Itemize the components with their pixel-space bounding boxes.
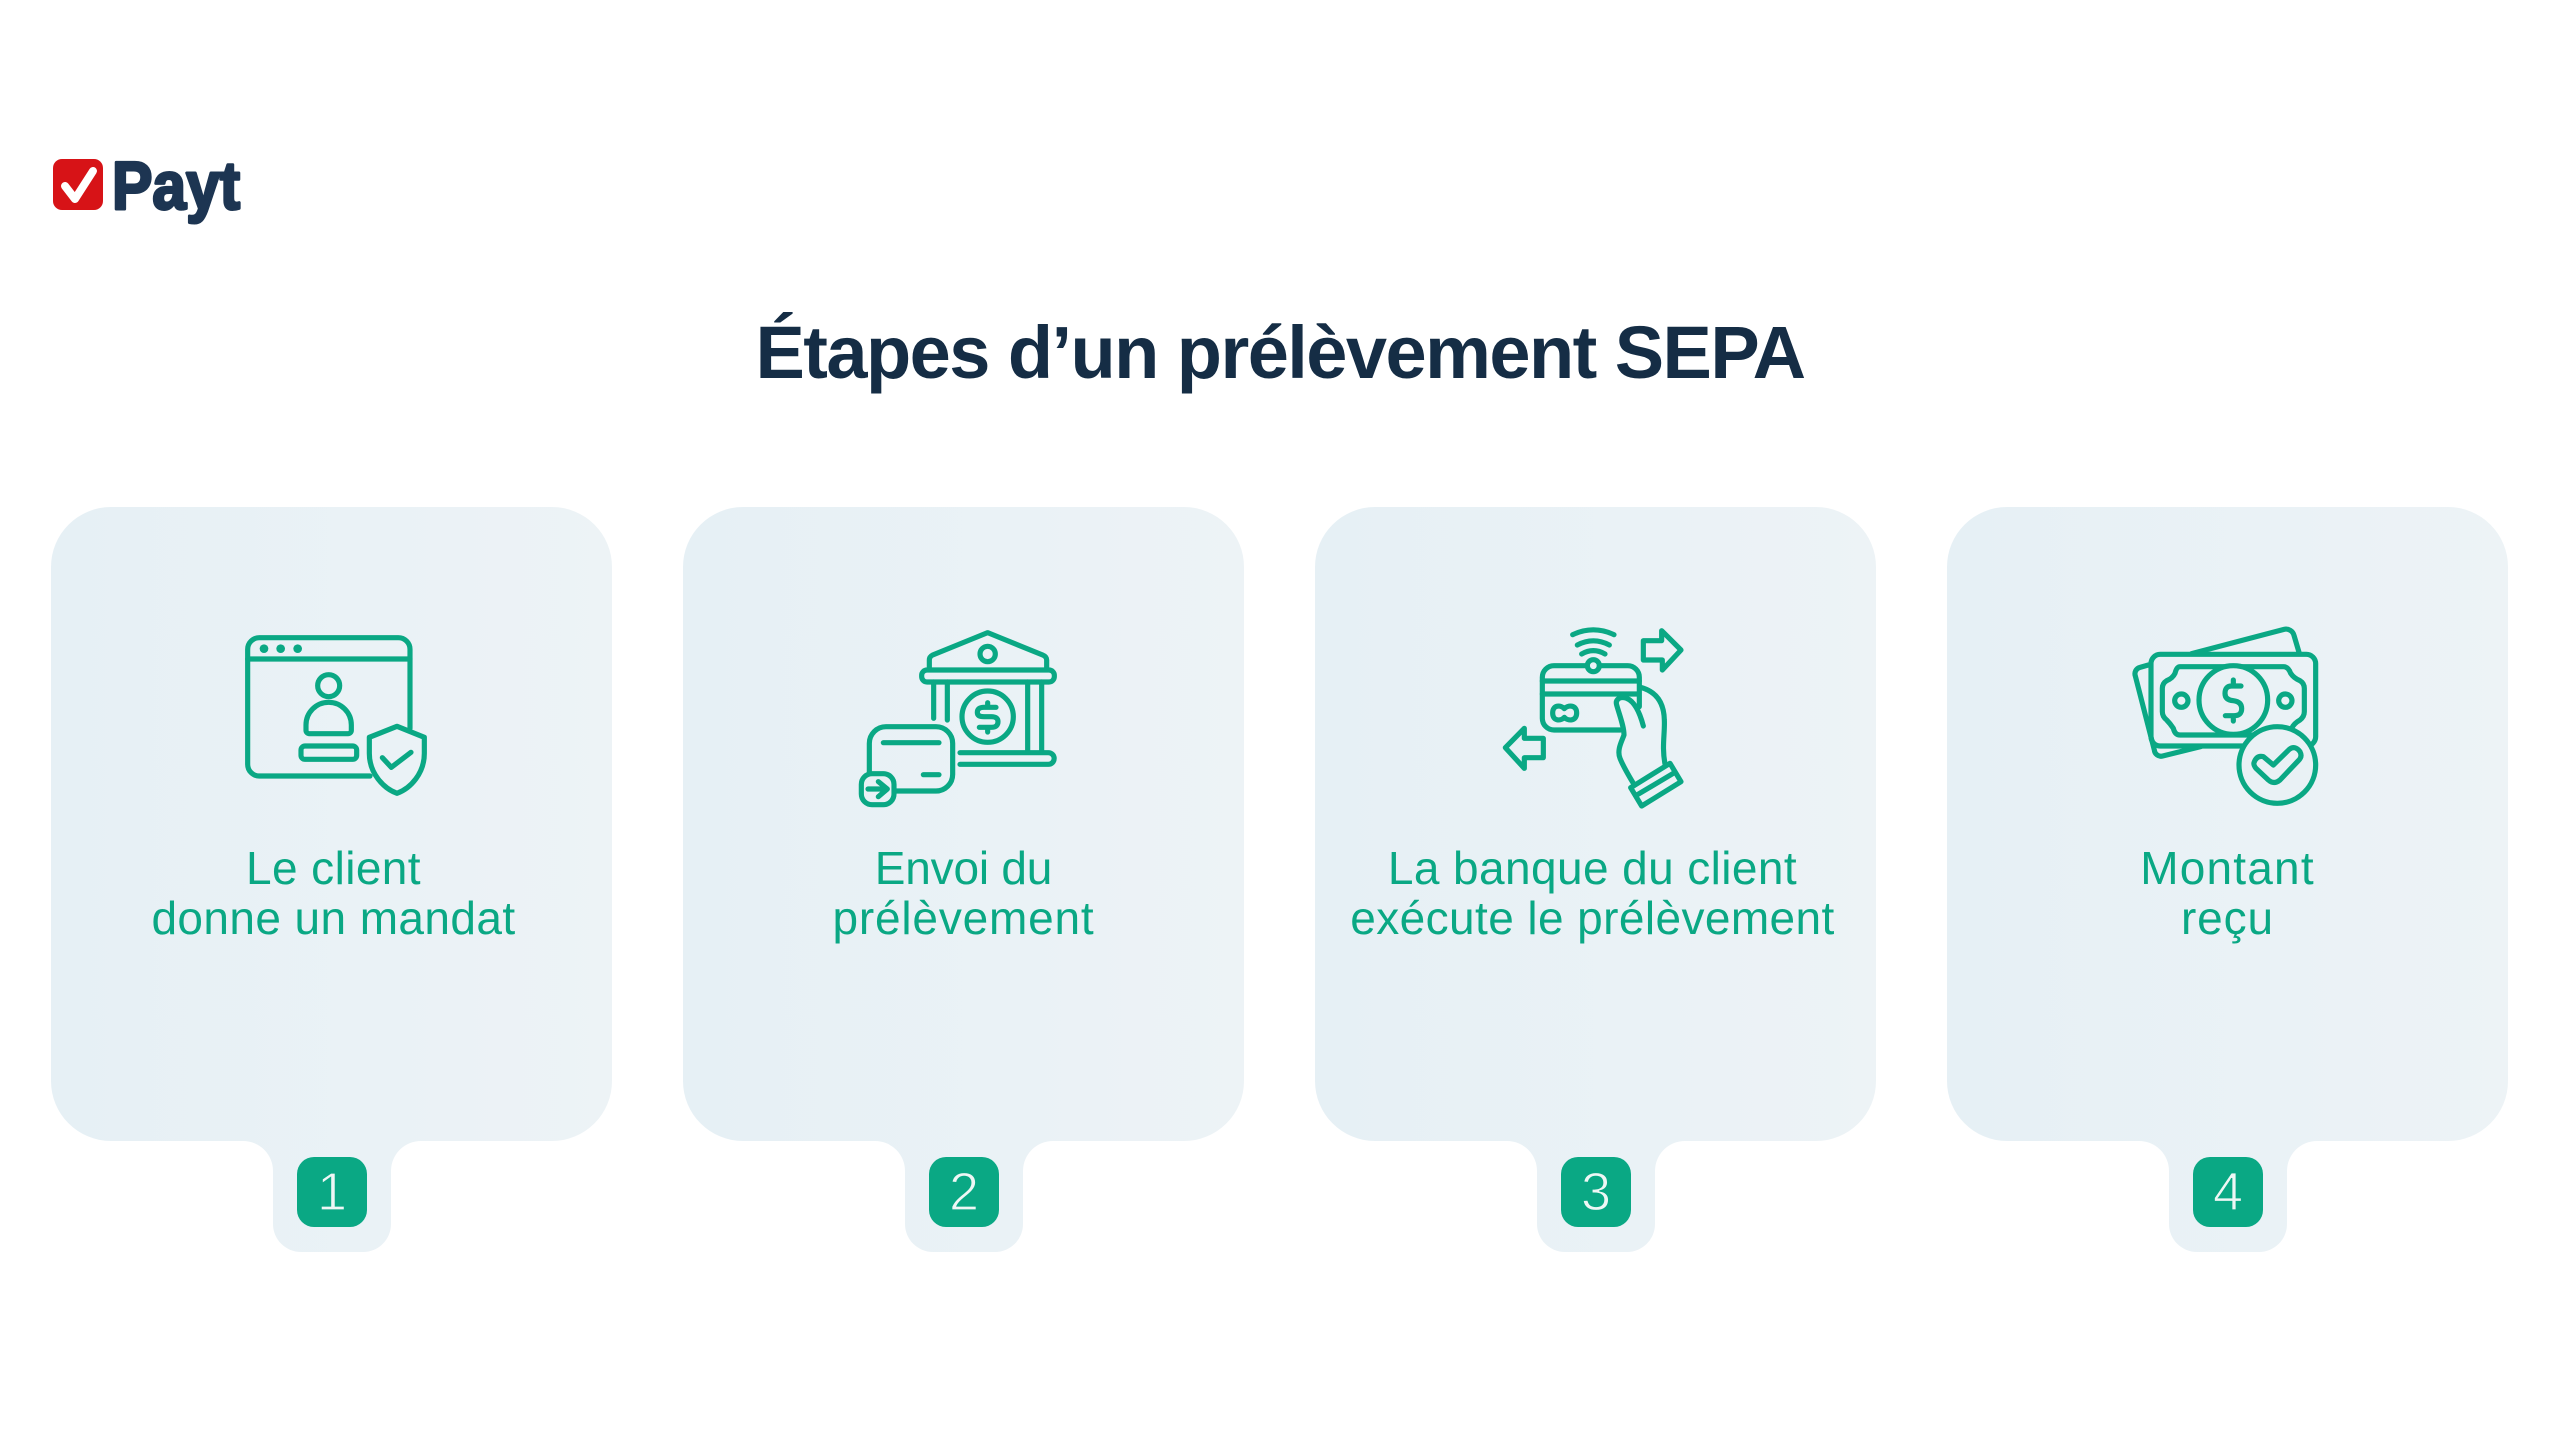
icon: bank and card bbox=[858, 630, 1057, 808]
step 2 text: Envoi du bbox=[875, 842, 1052, 894]
icon: browser window with user and shield bbox=[245, 635, 427, 796]
step 3 number badge bbox=[1561, 1157, 1631, 1227]
icon: contactless card in hand with arrows bbox=[1502, 627, 1684, 809]
panel: step 3 bbox=[1315, 507, 1876, 1252]
step 4 number badge bbox=[2193, 1157, 2263, 1227]
step 2 number badge bbox=[929, 1157, 999, 1227]
step 1 number badge bbox=[297, 1157, 367, 1227]
logo: Payt bbox=[53, 150, 241, 224]
step 4 number badge: 4 bbox=[2213, 1162, 2243, 1222]
step 1 text: donne un mandat bbox=[151, 892, 516, 944]
step 3 number badge: 3 bbox=[1581, 1162, 1611, 1222]
step 2 text bbox=[833, 842, 1094, 944]
panel: step 4 bbox=[1947, 507, 2508, 1252]
step 1 text bbox=[151, 842, 516, 944]
step 1 number badge: 1 bbox=[317, 1162, 347, 1222]
step 3 text bbox=[1350, 842, 1835, 944]
step 4 text: Montant bbox=[2140, 842, 2315, 894]
step 3 text: exécute le prélèvement bbox=[1350, 892, 1835, 944]
icon: banknotes with check bbox=[2132, 626, 2318, 806]
step 2 number badge: 2 bbox=[949, 1162, 979, 1222]
panel: step 2 bbox=[683, 507, 1244, 1252]
step 4 text: reçu bbox=[2181, 892, 2274, 944]
title: Étapes d’un prélèvement SEPA bbox=[755, 311, 1805, 394]
step 4 text bbox=[2140, 842, 2315, 944]
panel: step 1 bbox=[51, 507, 612, 1252]
step 3 text: La banque du client bbox=[1388, 842, 1797, 894]
step 2 text: prélèvement bbox=[833, 892, 1094, 944]
logo mark: red check square bbox=[53, 159, 103, 210]
step 1 text: Le client bbox=[246, 842, 421, 894]
